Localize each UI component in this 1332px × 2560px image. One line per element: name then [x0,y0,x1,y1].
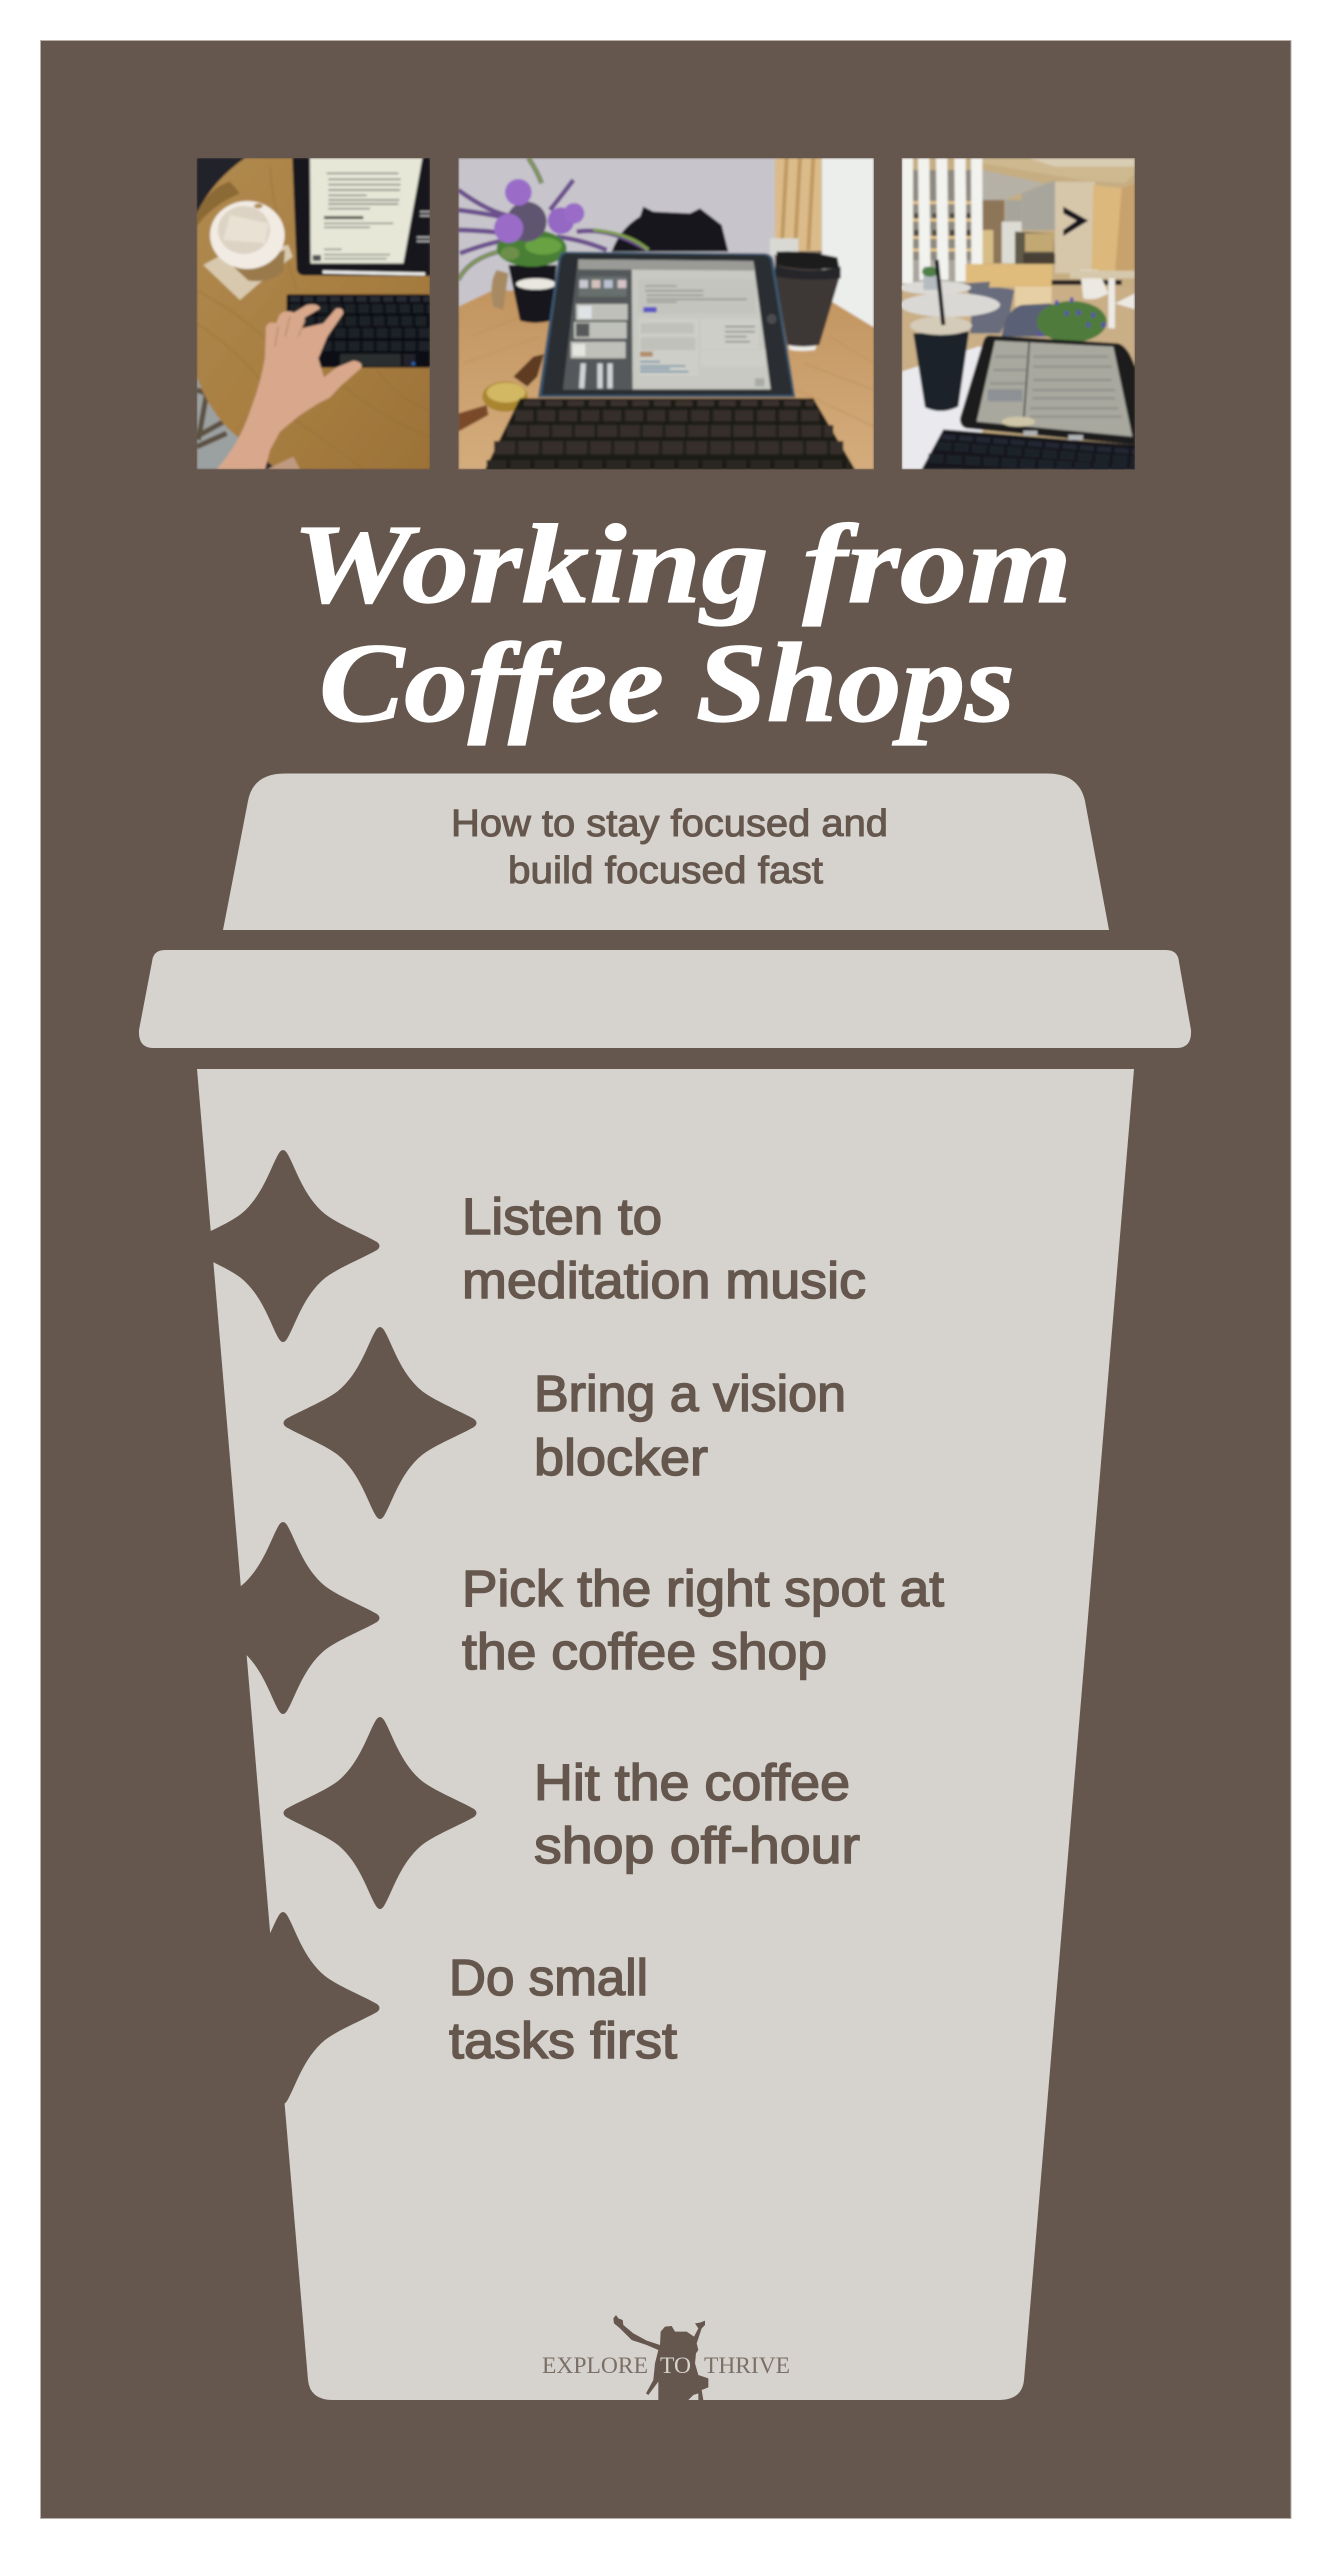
tip 2: bring a vision blocker: blocker [534,1429,708,1486]
photo: coffee shop interior with iced drink and tablet [899,158,1135,469]
tablet with dashboard [538,252,795,397]
table with iced drink [902,258,984,470]
hand [217,304,362,469]
cup lid band [139,950,1191,1048]
tip 5: do small tasks first: Do small [449,1949,648,2006]
icon: sparkle star [186,1522,380,1714]
logo: explore to thrive [527,2263,803,2400]
counter and pastry case [966,222,1055,288]
tablet on table [292,158,430,276]
cup lid top with subtitle [223,774,1109,930]
potted plant [458,158,648,323]
keyboard [287,294,430,368]
tip 4: hit the coffee shop off-hour: Hit the coffee [534,1754,850,1811]
wristwatch [458,354,544,432]
subtitle: How to stay focused and [451,803,888,845]
tip 3: pick the right spot: the coffee shop [462,1623,827,1680]
tip 4: hit the coffee shop off-hour: shop off-hour [534,1817,860,1874]
photo: tablet, keyboard and plant on wooden desk [458,158,874,469]
tip 2: bring a vision blocker [284,1327,846,1519]
white slats [907,158,977,283]
tip 3: pick the right spot: Pick the right spot at [462,1560,944,1617]
logo: explore to thrive: THRIVE [704,2353,790,2378]
takeaway coffee cup [775,251,841,351]
icon: sparkle star [284,1717,476,1909]
cup body [197,1069,1134,2400]
backpack [612,207,728,252]
icon: sparkle star [186,1150,380,1342]
logo: explore to thrive: TO [660,2353,691,2378]
keyboard [485,398,855,469]
subtitle [451,803,888,892]
photo: hand on keyboard at round wooden table [197,158,430,469]
tip 1: listen to meditation music: Listen to [462,1188,662,1245]
black chevron sign [1063,207,1088,236]
subtitle: build focused fast [508,850,823,892]
title [292,502,1072,746]
icon: sparkle star [284,1327,476,1519]
tip 2: bring a vision blocker: Bring a vision [534,1365,846,1422]
tip 3: pick the right spot [186,1522,944,1714]
chairs and tables [902,265,1135,339]
icon: person with raised arms silhouette [613,2315,708,2400]
tip 5: do small tasks first [186,1912,677,2104]
tip 1: listen to meditation music [186,1150,866,1342]
title: Coffee Shops [319,621,1015,746]
tip 4: hit the coffee shop off-hour [284,1717,860,1909]
logo: explore to thrive: EXPLORE [542,2353,648,2378]
keyboard [922,429,1135,469]
coffee cup with napkin [203,201,293,300]
tablet [960,335,1135,445]
icon: sparkle star [186,1912,380,2104]
flowering plant [1037,300,1107,342]
tip 1: listen to meditation music: meditation music [462,1252,866,1309]
tip 5: do small tasks first: tasks first [449,2012,677,2069]
title: Working from [292,502,1072,627]
